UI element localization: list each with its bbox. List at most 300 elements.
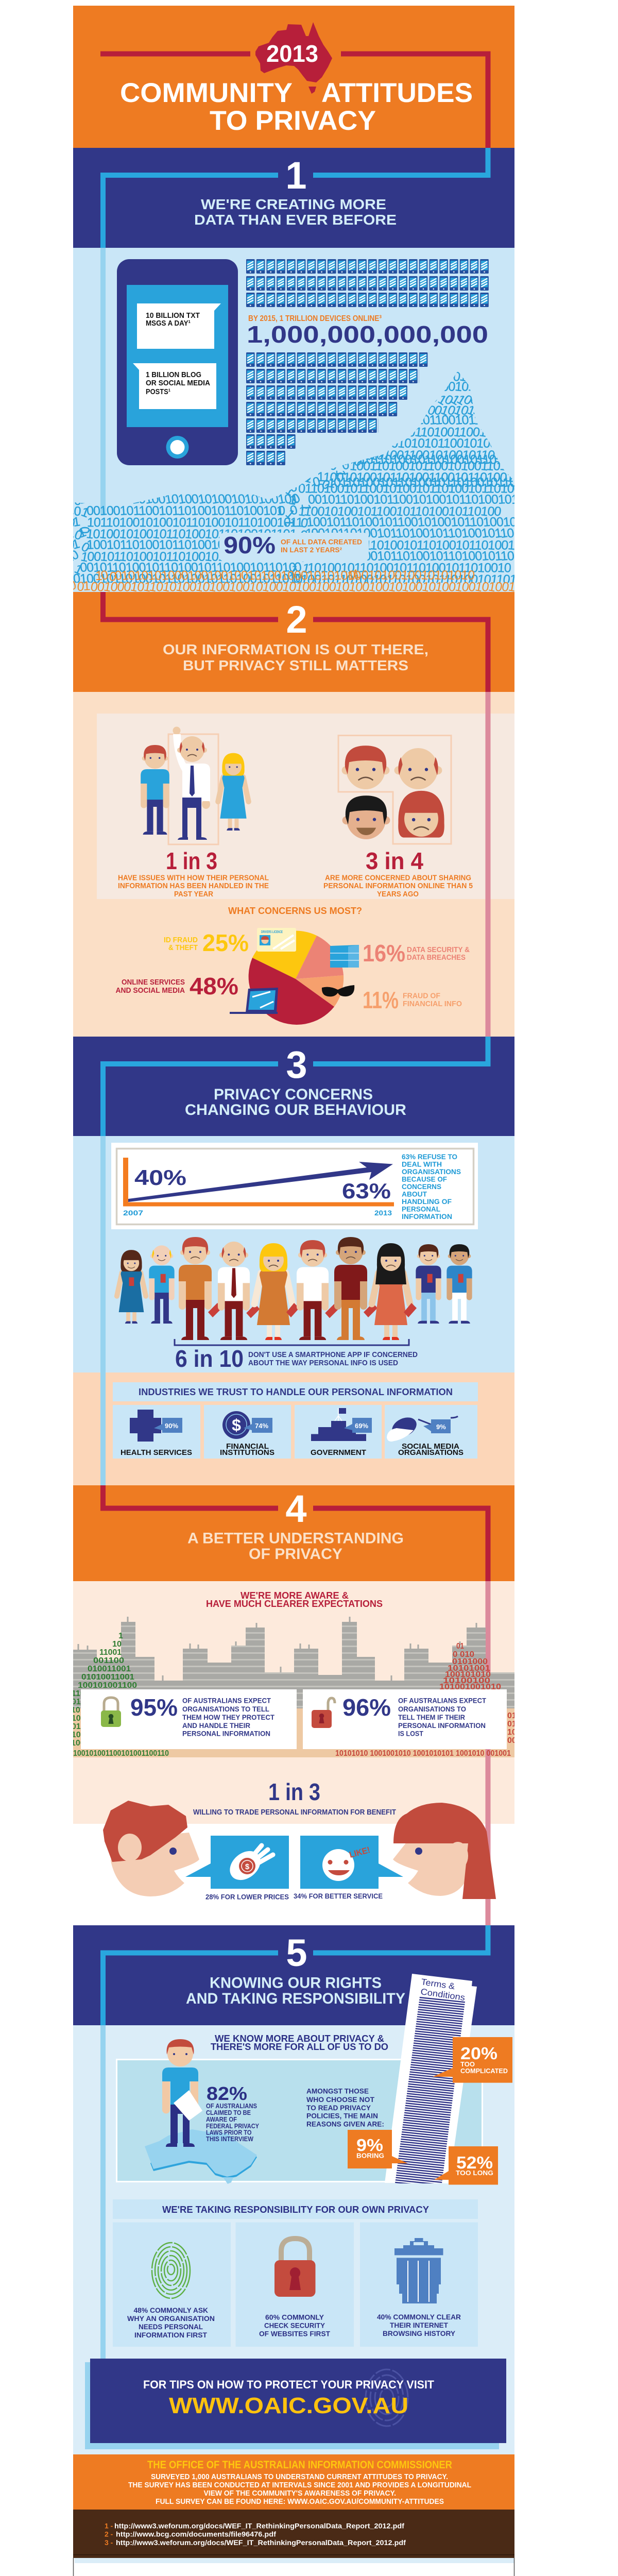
stat: 3 in 4: YEARS AGO — [377, 890, 419, 899]
pie chart: privacy concerns — [115, 928, 470, 1025]
section 3 heading — [185, 1043, 406, 1118]
figure: woman in blue dress — [218, 753, 249, 831]
red digit pile: 01 — [507, 1720, 517, 1728]
stat: 1 trillion devices: 1,000,000,000,000 — [247, 321, 488, 348]
binary data pile: 0100101101001011010010110100101101 — [293, 571, 517, 587]
card: padlock: CHECK SECURITY — [264, 2321, 325, 2330]
chart: refusing organisations trend: 2013 — [374, 1209, 392, 1217]
card: padlock — [236, 2223, 354, 2347]
card: fingerprint: 48% COMMONLY ASK — [134, 2306, 208, 2314]
binary data pile: 10110100101001011010010110100101101 — [66, 525, 297, 543]
title: COMMUNITY — [120, 78, 293, 108]
card: fingerprint: WHY AN ORGANISATION — [127, 2314, 215, 2323]
panel: about the survey: THE OFFICE OF THE AUSTRALIAN INFORMATION COMMISSIONER — [147, 2459, 452, 2471]
text: reasons intro: WHO CHOOSE NOT — [306, 2095, 374, 2104]
panel title: WE'RE TAKING RESPONSIBILITY FOR OUR OWN PRIVACY — [162, 2205, 429, 2215]
city skyline — [73, 1617, 514, 1708]
binary data pile: 00101010011010010100101001010100101 — [67, 492, 299, 509]
card: government — [295, 1405, 382, 1459]
stat: 1 in 3: HAVE ISSUES WITH HOW THEIR PERSONAL — [118, 874, 269, 882]
green digit pile: 01010011001 — [81, 1673, 134, 1682]
panel: 95 percent: 95% — [130, 1694, 178, 1721]
chart: refusing organisations trend: 40% — [134, 1165, 186, 1190]
panel: 95 percent: OF AUSTRALIANS EXPECT — [182, 1696, 271, 1704]
label: financial fraud: 11% — [363, 987, 399, 1013]
references: 2 - — [105, 2530, 113, 2538]
label: data security: DATA SECURITY & — [407, 945, 470, 954]
chart: refusing organisations trend — [111, 1143, 478, 1229]
stat: 3 in 4: 3 in 4 — [366, 848, 423, 874]
stat: 3 in 4: PERSONAL INFORMATION ONLINE THAN 5 — [323, 882, 473, 890]
binary data pile: 01001011010010110100101101001011010 — [65, 560, 296, 578]
stat: 90 percent: 90% — [224, 532, 276, 558]
green digit pile: 1 — [118, 1632, 123, 1640]
icon: trash bin — [394, 2238, 443, 2303]
card: social media organisations: 9% — [436, 1423, 446, 1431]
card: financial institutions: $ — [232, 1416, 241, 1434]
panel: 96 percent: ORGANISATIONS TO — [398, 1705, 466, 1713]
binary data pile: 101101001011010010110100101101001 — [296, 537, 515, 556]
binary data pile: 1011010010110100101101001011010010 — [287, 560, 511, 578]
text: reasons intro: REASONS GIVEN ARE: — [306, 2120, 384, 2128]
section 5 heading — [186, 1931, 405, 2007]
year: 2013 — [266, 40, 318, 67]
green digit pile: 010011001 — [88, 1665, 131, 1673]
title — [120, 78, 473, 136]
bubble: blog posts — [133, 363, 216, 409]
section 1 heading: WE'RE CREATING MORE — [201, 196, 386, 212]
green digit pile: 0101 — [67, 1714, 85, 1723]
panel: 95 percent: PERSONAL INFORMATION — [182, 1729, 270, 1737]
panel title — [113, 2199, 478, 2219]
orange digits: 1000101010100010010010010100100010101010 — [95, 568, 362, 584]
callout: 52 percent too long: TOO LONG — [456, 2169, 493, 2177]
card: trash bin — [360, 2223, 478, 2347]
orange digits — [73, 569, 514, 591]
references: 1 - — [105, 2521, 113, 2530]
card: financial institutions — [204, 1405, 291, 1459]
label: data security: DATA BREACHES — [407, 953, 466, 962]
icon: hand holding coin: $ — [245, 1862, 250, 1871]
stat: 3 in 4 — [323, 848, 473, 899]
panel: about the survey — [128, 2459, 471, 2506]
callout: 20 percent too complicated — [433, 2037, 512, 2083]
section 2 heading — [163, 598, 428, 673]
subheading: more aware: WE'RE MORE AWARE & — [241, 1590, 349, 1601]
binary data pile: 1001011010011001011 — [381, 423, 506, 443]
stat: 1 in 3 willing to trade: 1 in 3 — [268, 1778, 320, 1805]
stat: 82 percent: LAWS PRIOR TO — [206, 2129, 251, 2137]
red digit pile: 00 — [507, 1736, 517, 1745]
map: Australia — [145, 2129, 257, 2184]
callout: 52 percent too long: 52% — [456, 2153, 493, 2172]
text: reasons intro — [306, 2087, 384, 2128]
icon: Australia map — [255, 22, 332, 94]
card: social media organisations: SOCIAL MEDIA — [402, 1442, 459, 1451]
binary data pile: 01100101 — [422, 378, 475, 395]
binary data pile: 1010010110100101101001011010010110 — [67, 547, 290, 565]
stat: 82 percent: CLAIMED TO BE — [206, 2109, 251, 2116]
faint fingerprint — [366, 2369, 408, 2426]
figure 2: boy with phone — [149, 1245, 175, 1324]
section 2 heading: 2 — [286, 598, 307, 641]
binary data pile: 1001011010010110100101101001 — [339, 451, 524, 469]
card: trash bin: BROWSING HISTORY — [383, 2329, 456, 2337]
red digit pile: 100101010 — [445, 1670, 491, 1679]
card: health services: 90% — [165, 1422, 178, 1430]
panel: 96 percent: PERSONAL INFORMATION — [398, 1721, 486, 1730]
speech bubble: lower prices: 28% FOR LOWER PRICES — [205, 1893, 289, 1901]
section 4 heading: 4 — [285, 1487, 307, 1530]
speech bubble: lower prices — [185, 1836, 289, 1901]
callout: 9 percent boring — [348, 2130, 408, 2168]
panel: 1 in 3 people — [118, 726, 269, 899]
header: title and Australia map — [120, 22, 473, 136]
binary data pile: 01001010101100101001011 — [370, 434, 523, 452]
title: ATTITUDES — [321, 78, 473, 108]
orange digits: 0101010010010101010 — [347, 566, 475, 583]
green digit pile: 11001 — [99, 1648, 122, 1657]
label: data security: 16% — [363, 940, 405, 967]
call to action panel: FOR TIPS ON HOW TO PROTECT YOUR PRIVACY VISIT — [143, 2378, 435, 2391]
panel title — [113, 1382, 478, 1401]
card: fingerprint — [113, 2223, 231, 2347]
callout: 20 percent too complicated: TOO — [460, 2060, 475, 2068]
card: fingerprint: NEEDS PERSONAL — [139, 2323, 203, 2331]
section 1 heading — [194, 154, 397, 228]
panel: trusted industries — [113, 1382, 478, 1459]
binary data pile: 010011010010110010100101101001011010011 — [277, 480, 533, 499]
green digit pile: 1010 — [67, 1722, 85, 1731]
icon: smartphone with message bubbles — [117, 259, 238, 465]
references: http://www3.weforum.org/docs/WEF_IT_RethinkingPersonalData_Report_2012.pdf — [116, 2538, 406, 2547]
binary data pile: 0101100101001011001011010010110100 — [278, 502, 502, 522]
binary data pile: 10110010100101101001100101101001010 — [299, 470, 534, 486]
section 2 heading: OUR INFORMATION IS OUT THERE, — [163, 641, 428, 657]
binary data pile: 010010110100101101001011010010110 — [298, 549, 514, 565]
terms and conditions document: Conditions — [420, 1987, 466, 2003]
icon: smiley — [322, 1845, 371, 1881]
figure 4: man in white shirt — [218, 1242, 260, 1340]
label: data security — [363, 940, 470, 967]
panel: about the survey: SURVEYED 1,000 AUSTRALIANS TO UNDERSTAND CURRENT ATTITUDES TO PRIVACY. — [151, 2473, 448, 2481]
binary data pile: 1010010110100101100101001011010010 — [282, 515, 517, 531]
chart: refusing organisations trend: 2007 — [123, 1209, 143, 1217]
callout: 9 percent boring: BORING — [356, 2151, 384, 2159]
stat: 90 percent: IN LAST 2 YEARS² — [281, 546, 342, 554]
green digit pile: 0101 — [67, 1731, 85, 1739]
subheading: more aware: HAVE MUCH CLEARER EXPECTATIONS — [206, 1599, 383, 1609]
panel: 96 percent — [303, 1689, 507, 1749]
figure 3: man in orange — [179, 1237, 222, 1340]
icon: laptop — [230, 988, 278, 1014]
bubble: text messages: MSGS A DAY¹ — [146, 319, 191, 328]
card: padlock: OF WEBSITES FIRST — [259, 2330, 330, 2338]
references — [105, 2521, 406, 2547]
binary data pile: 0101001011010010110100101101001010 — [66, 536, 290, 555]
face: smiling man — [342, 795, 390, 839]
label: online services — [115, 973, 238, 999]
stat: 1 in 3 willing to trade: WILLING TO TRADE PERSONAL INFORMATION FOR BENEFIT — [193, 1808, 396, 1817]
speech bubble: better service: 34% FOR BETTER SERVICE — [294, 1892, 383, 1900]
figure: man raising hand — [173, 726, 210, 840]
callout: 9 percent boring: 9% — [356, 2136, 383, 2155]
section 4 heading — [187, 1487, 404, 1563]
card: social media organisations — [385, 1405, 477, 1459]
panel: 95 percent: ORGANISATIONS TO TELL — [182, 1705, 269, 1713]
binary data pile: 101001011010010110100101101001011010 — [66, 571, 303, 587]
panel: 95 percent: THEM HOW THEY PROTECT — [182, 1713, 274, 1721]
device icon grid: bottom staircase — [246, 352, 429, 465]
binary data pile: 10100101101001011001010010110100101 — [288, 490, 519, 511]
arrow — [128, 1162, 393, 1202]
label: online services: ONLINE SERVICES — [122, 978, 185, 987]
red digit pile — [335, 1642, 517, 1758]
text: reasons intro: AMONGST THOSE — [306, 2087, 369, 2095]
stat: 6 in 10 with bracket: ABOUT THE WAY PERSONAL INFO IS USED — [248, 1359, 398, 1367]
section 5 heading: 5 — [286, 1931, 307, 1974]
references: http://www3.weforum.org/docs/WEF_IT_RethinkingPersonalData_Report_2012.pdf — [114, 2521, 404, 2530]
red digit pile: 101001001010 — [439, 1683, 501, 1691]
binary data pile: 01010110010110 — [393, 412, 488, 429]
title: TO PRIVACY — [210, 106, 376, 136]
card: trash bin: 40% COMMONLY CLEAR — [377, 2313, 461, 2321]
icon: drivers licence: DRIVERS LICENCE — [261, 930, 283, 934]
stat: 82 percent: 82% — [207, 2083, 247, 2104]
panel: 95 percent: AND HANDLE THEIR — [182, 1721, 250, 1730]
binary data pile: 101001001011001011010010110100101 — [65, 503, 284, 520]
section 5 heading: AND TAKING RESPONSIBILITY — [186, 1990, 405, 2007]
card: financial institutions: FINANCIAL — [226, 1442, 269, 1451]
binary data pile: 0101011001 — [415, 389, 488, 408]
bubble: blog posts: 1 BILLION BLOG — [146, 370, 201, 379]
green digit pile: 10 — [112, 1640, 122, 1649]
panel: 96 percent: IS LOST — [398, 1729, 423, 1737]
label: ID fraud: 25% — [202, 929, 249, 956]
text: reasons intro: TO READ PRIVACY — [306, 2104, 371, 2112]
callout: 20 percent too complicated: 20% — [460, 2044, 497, 2063]
icon: padlock — [274, 2239, 315, 2297]
subheading: we know more: THERE'S MORE FOR ALL OF US TO DO — [211, 2042, 388, 2052]
chart caption: HANDLING OF — [402, 1198, 452, 1206]
label: online services: AND SOCIAL MEDIA — [115, 986, 185, 995]
green digit pile: 100101001100101001100110 — [73, 1749, 169, 1758]
stat: 6 in 10 with bracket: 6 in 10 — [175, 1345, 244, 1372]
section 3 heading: PRIVACY CONCERNS — [214, 1086, 373, 1103]
stat: 1 in 3 willing to trade — [193, 1778, 396, 1817]
icon: bandit mask — [322, 985, 354, 996]
red digit pile: 0 010 — [453, 1650, 474, 1659]
section 1 heading: DATA THAN EVER BEFORE — [194, 212, 397, 228]
references: http://www.bcg.com/documents/file96476.pdf — [116, 2530, 276, 2538]
red digit pile: 10 — [507, 1728, 517, 1737]
section 3 heading: 3 — [286, 1043, 307, 1086]
face: red hair woman — [398, 791, 444, 838]
right talking head — [393, 1803, 496, 1899]
face: bald man — [394, 748, 442, 789]
text: reasons intro: POLICIES, THE MAIN — [306, 2111, 378, 2120]
figure 1: girl with phone — [117, 1250, 146, 1324]
card: social media organisations: ORGANISATIONS — [398, 1448, 464, 1457]
label: online services: 48% — [190, 973, 238, 999]
binary data pile: 101101001100101001011010101 — [349, 446, 529, 463]
heading: what concerns us most: WHAT CONCERNS US MOST? — [228, 906, 362, 916]
connector line running through all sections — [100, 54, 488, 2359]
figure: boy — [141, 745, 169, 835]
bubble: blog posts: POSTS¹ — [146, 387, 170, 396]
stat: 1 trillion devices — [247, 314, 488, 348]
orange digits: 0010010001011010100101001001010010100100101001001010010100100101001 — [67, 578, 517, 595]
callout: 52 percent too long — [434, 2146, 498, 2184]
stat: 1 in 3: INFORMATION HAS BEEN HANDLED IN THE — [118, 882, 269, 890]
figure 10: boy in blue — [447, 1244, 472, 1324]
chart caption: CONCERNS — [402, 1183, 441, 1191]
binary data pile: 101001010110 — [406, 401, 489, 418]
green digit pile: 1101 — [67, 1706, 85, 1715]
label: ID fraud: & THEFT — [168, 943, 198, 952]
panel: about the survey: FULL SURVEY CAN BE FOUND HERE: WWW.OAIC.GOV.AU/COMMUNITY-ATTITUDES — [156, 2498, 444, 2506]
panel: 96 percent: OF AUSTRALIANS EXPECT — [398, 1696, 486, 1704]
icon: drivers licence — [257, 928, 296, 952]
binary digits: green and red — [67, 1632, 517, 1758]
bubble: text messages — [137, 303, 221, 349]
stat: 1 in 3: 1 in 3 — [166, 848, 217, 874]
red digit pile: 10100100 — [443, 1676, 490, 1685]
label: financial fraud — [363, 987, 462, 1013]
panel backgrounds — [73, 6, 514, 2576]
figure 5: woman in orange — [254, 1243, 299, 1340]
card: health services: HEALTH SERVICES — [121, 1448, 192, 1457]
panel title: INDUSTRIES WE TRUST TO HANDLE OUR PERSONAL INFORMATION — [139, 1387, 453, 1397]
panel: 96 percent: TELL THEM IF THEIR — [398, 1713, 465, 1721]
stat: 1 in 3: PAST YEAR — [174, 890, 213, 899]
card: financial institutions: INSTITUTIONS — [220, 1448, 274, 1457]
call to action panel — [85, 2359, 506, 2449]
card: padlock: 60% COMMONLY — [265, 2313, 324, 2321]
green digit pile: 1100 — [67, 1739, 85, 1748]
call to action panel: WWW.OAIC.GOV.AU — [169, 2393, 408, 2418]
stat: 90 percent — [224, 532, 362, 558]
chart caption — [402, 1153, 461, 1221]
stat: 82 percent — [206, 2083, 259, 2143]
figure 6: man with red hair — [297, 1240, 338, 1340]
subheading: we know more: WE KNOW MORE ABOUT PRIVACY & — [215, 2033, 384, 2044]
chart caption: ABOUT — [402, 1190, 427, 1198]
callout: 20 percent too complicated: COMPLICATED — [460, 2067, 508, 2075]
card: government: 69% — [355, 1422, 368, 1430]
stat: 82 percent: THIS INTERVIEW — [206, 2135, 254, 2143]
card: trash bin: THEIR INTERNET — [390, 2321, 448, 2329]
binary data pile: 0101001101001011001010011010010 — [330, 457, 534, 477]
icon: open padlock — [312, 1698, 335, 1728]
section 1 heading: 1 — [285, 154, 307, 197]
bubble: blog posts: OR SOCIAL MEDIA — [146, 379, 210, 387]
terms and conditions document — [385, 1974, 477, 2183]
icon: smiley: LIKE! — [348, 1845, 371, 1860]
label: financial fraud: FRAUD OF — [403, 991, 440, 1001]
green digit pile: 0010 — [67, 1698, 85, 1706]
stat: 90 percent: OF ALL DATA CREATED — [281, 538, 362, 546]
label: financial fraud: FINANCIAL INFO — [403, 999, 462, 1008]
speech bubble: better service — [294, 1836, 403, 1900]
stat: 6 in 10 with bracket: DON'T USE A SMARTPHONE APP IF CONCERNED — [248, 1350, 418, 1359]
subheading: more aware — [206, 1590, 383, 1609]
figure 7: man in maroon — [334, 1237, 377, 1340]
subheading: we know more — [211, 2033, 388, 2052]
label: ID fraud — [164, 929, 249, 956]
icon: fingerprint — [152, 2243, 190, 2298]
green digit pile: 100101001100 — [78, 1681, 137, 1690]
icon: locked padlock — [101, 1698, 121, 1727]
chart caption: BECAUSE OF — [402, 1176, 447, 1183]
face: red hair man — [342, 745, 389, 789]
stat: 82 percent: FEDERAL PRIVACY — [206, 2122, 259, 2130]
stat: 82 percent: AWARE OF — [206, 2115, 237, 2123]
stat: 1 in 3 — [118, 848, 269, 899]
stat: 1 trillion devices: BY 2015, 1 TRILLION DEVICES ONLINE³ — [248, 314, 382, 323]
references: 3 - — [105, 2538, 113, 2547]
card: health services — [113, 1405, 200, 1459]
red digit pile: 01 — [456, 1642, 464, 1651]
panel: 96 percent: 96% — [342, 1694, 391, 1721]
green digit pile: 001100 — [93, 1656, 124, 1665]
green digit pile — [67, 1632, 169, 1758]
chart caption: PERSONAL — [402, 1206, 440, 1213]
chart caption: 63% REFUSE TO — [402, 1153, 457, 1161]
stat: 6 in 10 with bracket — [175, 1339, 418, 1372]
binary data pile: 010010110100101101001011010010110 — [298, 526, 514, 543]
red digit pile: 0101000 — [452, 1657, 488, 1666]
label: ID fraud: ID FRAUD — [164, 936, 198, 944]
section 2 heading: BUT PRIVACY STILL MATTERS — [183, 657, 408, 673]
bubble: text messages: 10 BILLION TXT — [146, 311, 200, 320]
chart: refusing organisations trend: 63% — [342, 1179, 391, 1203]
binary data pile: 010101101001010010110100101101001011 — [66, 514, 303, 533]
card: fingerprint: INFORMATION FIRST — [134, 2331, 207, 2339]
panel: taking responsibility — [113, 2199, 478, 2347]
icon: hand holding coin — [224, 1845, 273, 1886]
panel: privacy law awareness — [116, 2039, 482, 2184]
section 3 heading: CHANGING OUR BEHAVIOUR — [185, 1101, 406, 1118]
stat: 82 percent: OF AUSTRALIANS — [206, 2102, 257, 2110]
terms and conditions document: Terms & — [420, 1977, 456, 1991]
panel: about the survey: THE SURVEY HAS BEEN CONDUCTED AT INTERVALS SINCE 2001 AND PROVIDES A LONGITUDINAL — [128, 2481, 471, 2489]
figure 8: woman in coral — [372, 1243, 417, 1340]
icon: server — [330, 945, 359, 968]
left talking head — [103, 1801, 199, 1896]
row of ten people — [117, 1237, 472, 1340]
chart caption: DEAL WITH — [402, 1160, 442, 1168]
device icon grid: top — [246, 259, 490, 307]
binary data pile: 0010110100101101001011010010110 — [311, 474, 517, 493]
panel: 95 percent — [81, 1689, 297, 1749]
figure 9: boy in navy — [416, 1244, 441, 1324]
stat: 3 in 4: ARE MORE CONCERNED ABOUT SHARING — [325, 874, 471, 882]
card: government: GOVERNMENT — [311, 1448, 366, 1457]
red digit pile: 10101001 — [448, 1664, 490, 1673]
binary data pile — [65, 367, 534, 595]
chart caption: ORGANISATIONS — [402, 1168, 461, 1176]
red digit pile: 01 — [507, 1711, 517, 1720]
section 4 heading: A BETTER UNDERSTANDING — [187, 1530, 404, 1547]
chart caption: INFORMATION — [402, 1213, 452, 1221]
panel: about the survey: VIEW OF THE COMMUNITY'S AWARENESS OF PRIVACY. — [204, 2489, 396, 2498]
panel: 3 in 4 faces — [323, 736, 473, 899]
binary data pile: 0100101 — [433, 367, 481, 385]
figure: person on map — [162, 2039, 202, 2147]
green digit pile: 0110 — [67, 1689, 85, 1698]
red digit pile: 10101010 1001001010 1001010101 1001010 001001 — [335, 1749, 511, 1758]
